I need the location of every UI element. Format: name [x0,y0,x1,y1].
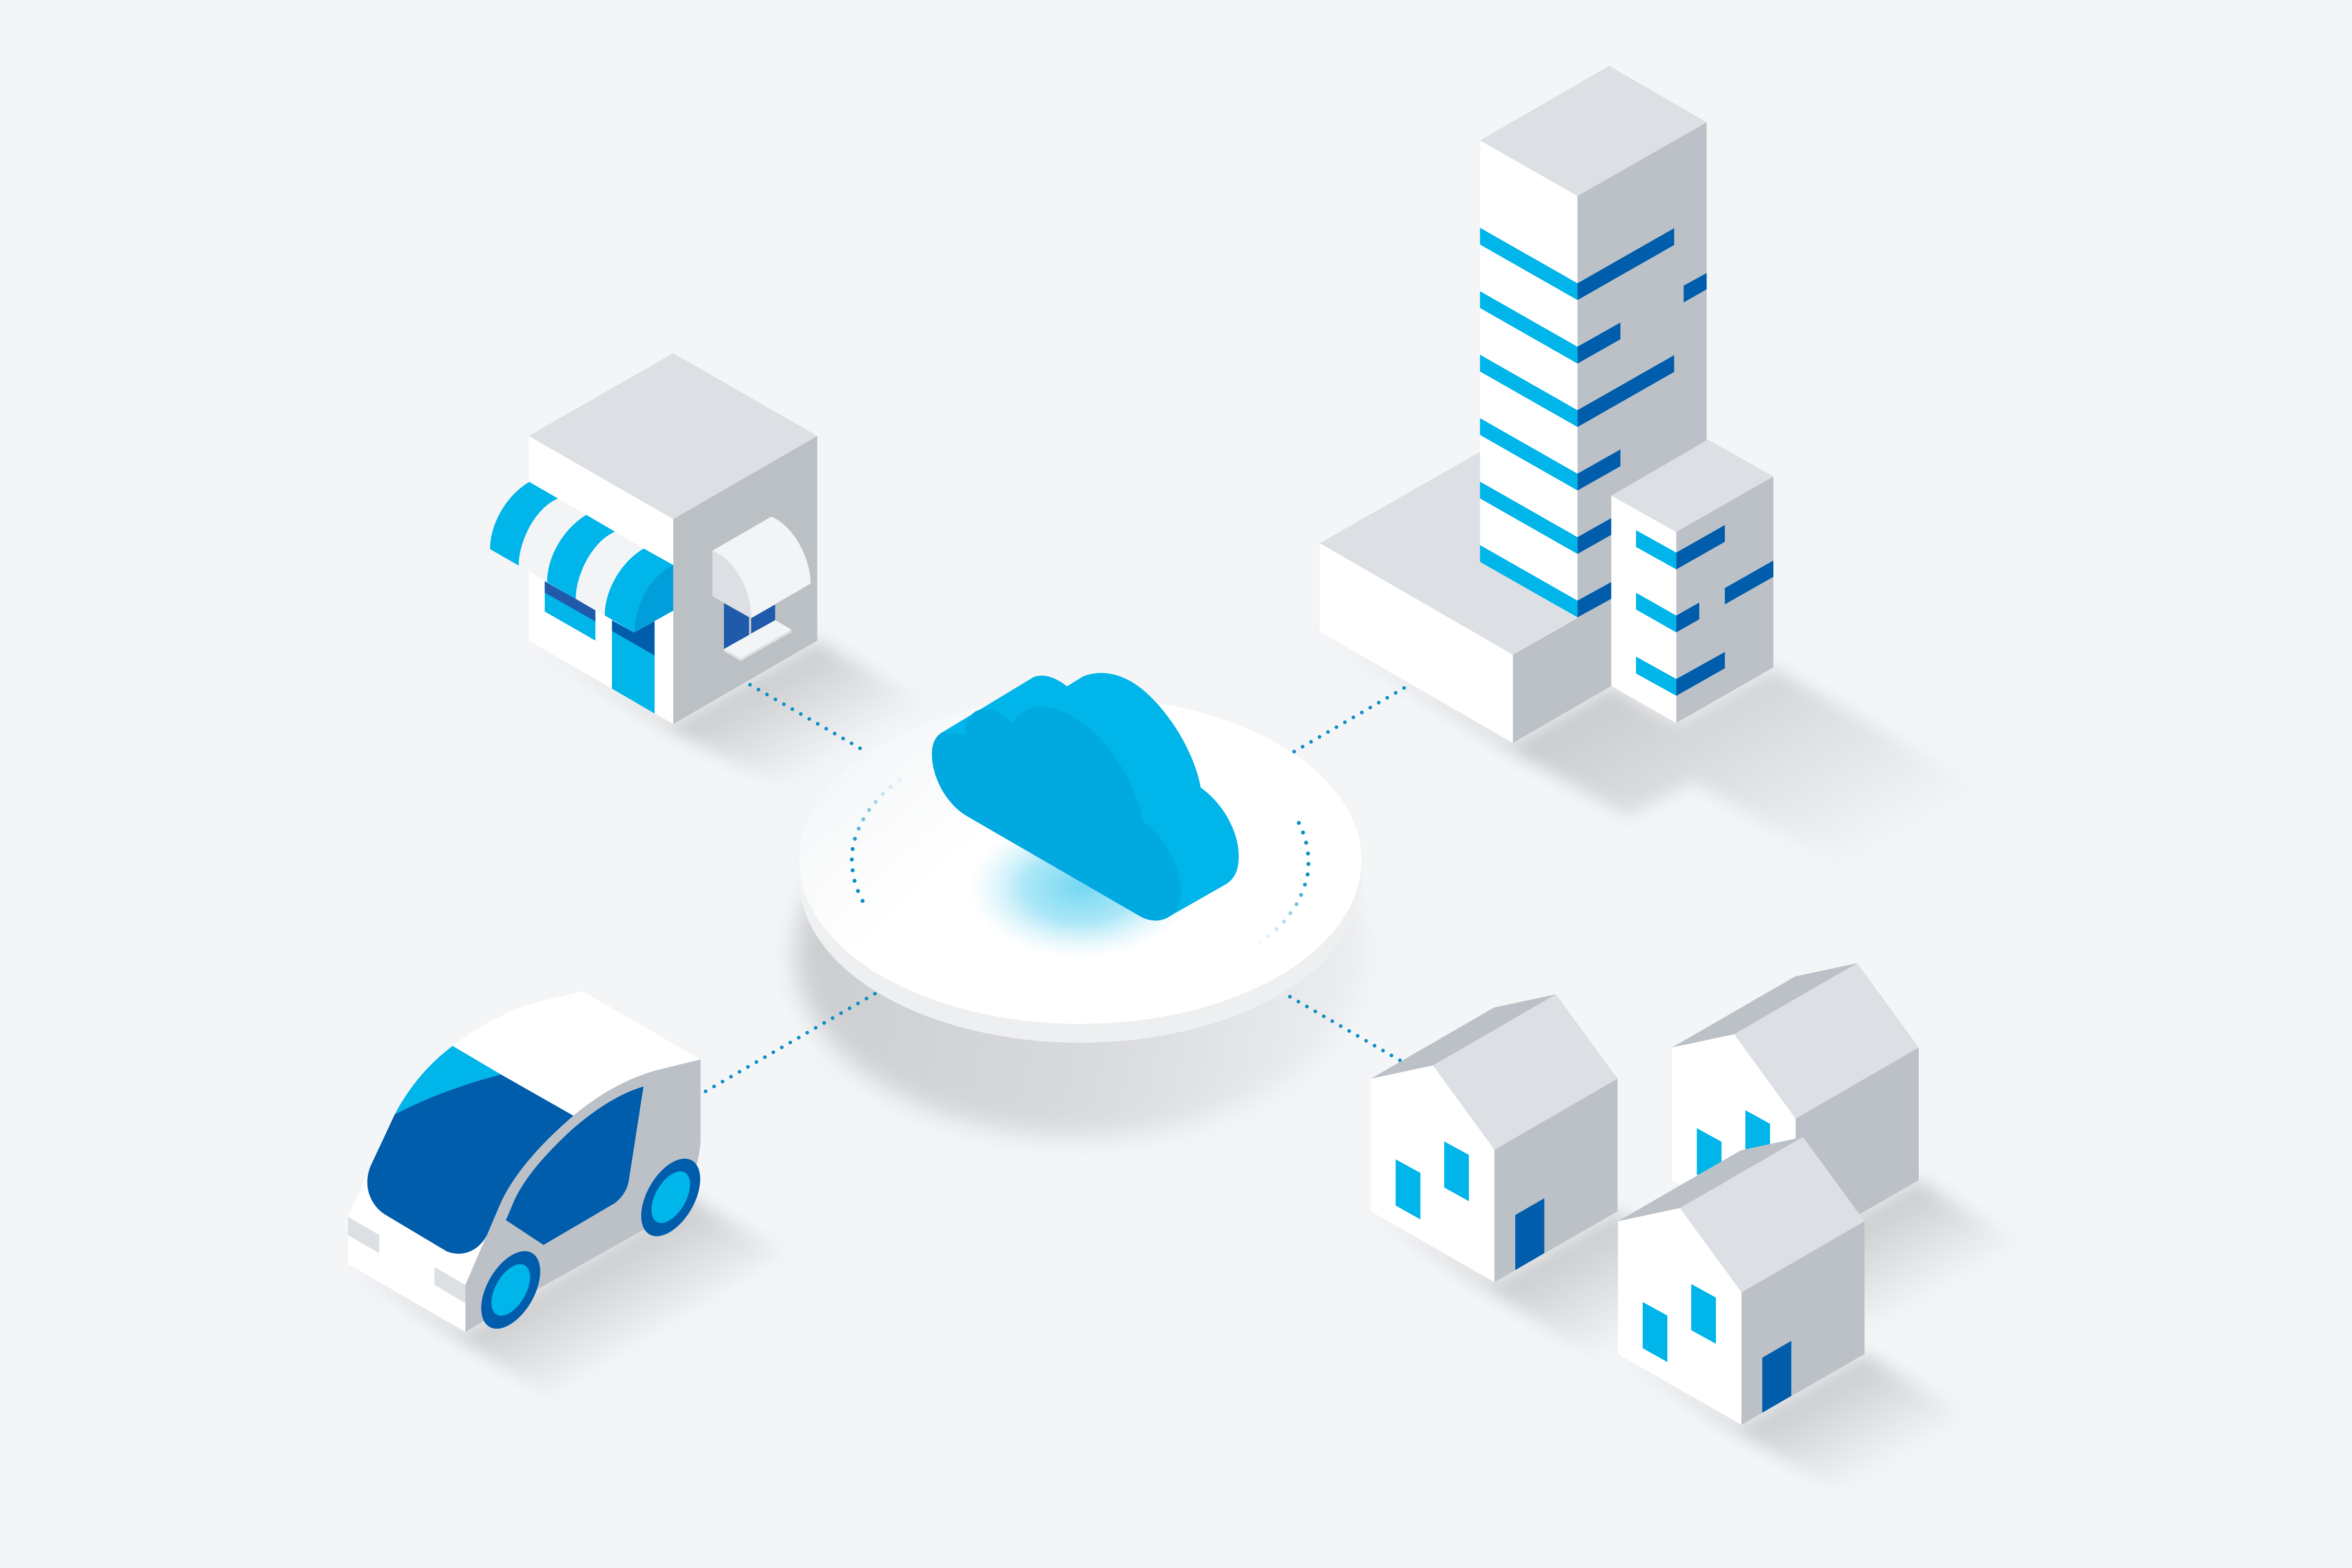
car white body [348,991,700,1332]
cloud front face [932,707,1181,920]
small building window bands side [1676,525,1773,696]
house: back right [1672,963,1919,1251]
store side wall [673,436,817,724]
rear wheel [629,1150,712,1245]
side window [506,1087,643,1245]
dotted connector: store to cloud [750,685,868,753]
shadow: house back right [1672,1180,2020,1330]
store building [490,353,817,724]
glow under cloud [969,817,1193,958]
side window with awning [712,517,811,661]
dotted arc: left of cloud [850,778,902,903]
tower window bands side [1577,228,1707,617]
central platform disc [799,697,1362,1043]
windshield [367,1075,573,1254]
car [348,991,712,1338]
store front window [545,581,595,641]
house: front [1618,1137,1864,1425]
office buildings [1320,66,1773,743]
cloud extruded back [932,673,1239,920]
headlight right [434,1267,465,1303]
dotted connector: houses to cloud [1290,997,1400,1060]
store front wall [529,436,673,724]
dotted connector: car to cloud [706,993,876,1091]
store roof [529,353,817,519]
house: left [1371,994,1618,1282]
windshield highlight [395,1046,501,1114]
store door [612,620,654,713]
platform top [799,697,1362,1024]
striped awning [490,482,673,632]
shadow: house front [1618,1354,1968,1495]
podium block [1320,442,1692,743]
shadow: central platform [796,771,1366,1137]
dotted connector: offices to cloud [1294,688,1404,752]
tower window bands front [1480,228,1577,617]
dotted arc: right of cloud [1258,821,1310,944]
headlight left [348,1217,379,1253]
shadow: house left [1371,1212,1730,1364]
icon: cloud [932,673,1239,920]
shadow: store [529,641,925,787]
small building window bands front [1636,530,1676,696]
platform side edge [799,716,1362,1043]
car side panel [465,1059,700,1332]
tower [1480,66,1707,618]
shadow: office buildings [1320,630,1981,868]
shadow: car [348,1192,784,1396]
front wheel [469,1242,552,1338]
small building [1611,440,1773,723]
